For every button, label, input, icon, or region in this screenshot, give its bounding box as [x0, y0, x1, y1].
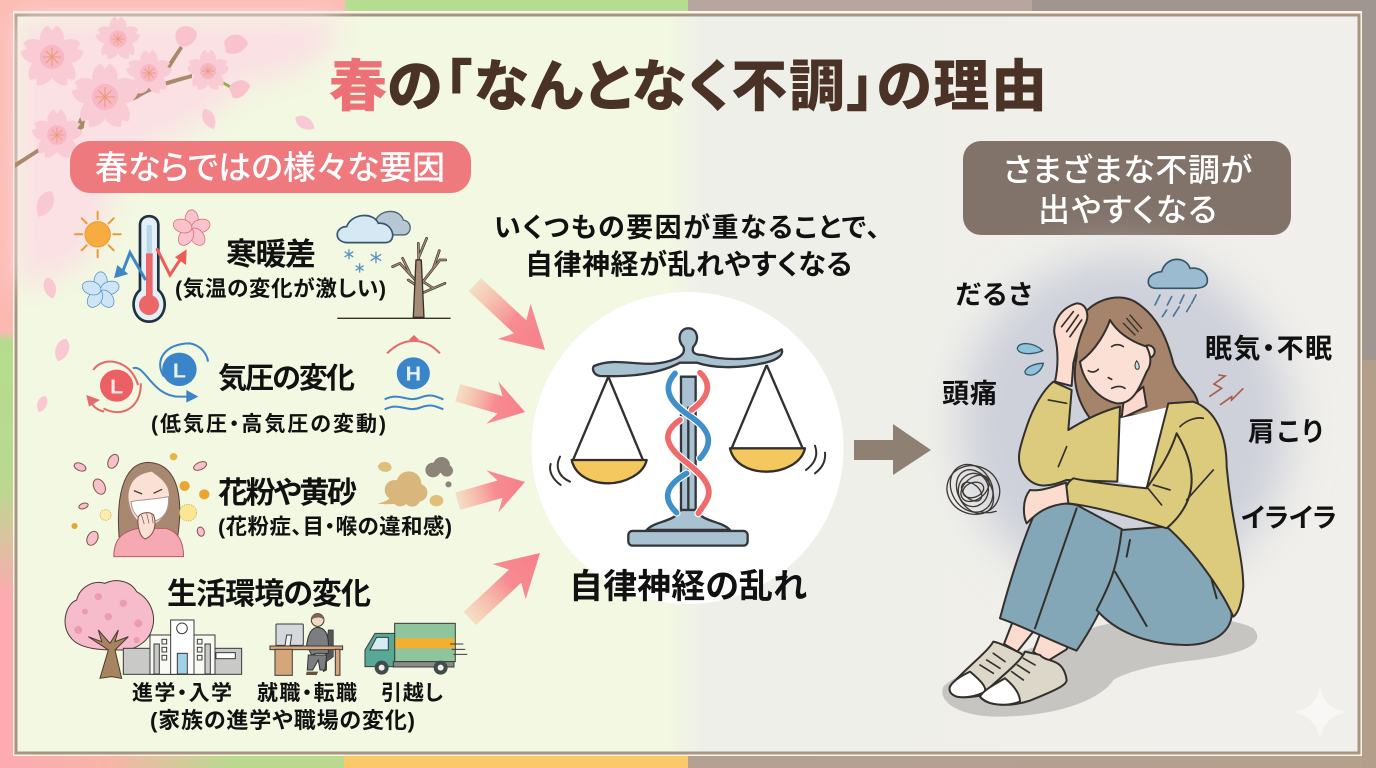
- factor: temperature difference: (気温の変化が激しい): [175, 276, 386, 301]
- icon: balance scale with helix: [550, 328, 825, 546]
- factor: lifestyle change: [65, 578, 467, 733]
- factor: temperature difference: 寒暖差: [226, 237, 316, 272]
- factor: pollen and dust: [71, 453, 453, 557]
- icon: cherry tree: [65, 581, 154, 678]
- factor: pressure change: (低気圧・高気圧の変動): [151, 413, 386, 436]
- icon: low pressure swirls: L: [110, 376, 123, 398]
- title: の「なんとなく不調」の理由: [387, 55, 1047, 118]
- arrow: pollen to balance: [452, 461, 531, 522]
- icon: high pressure: H: [406, 363, 421, 386]
- illustration: troubled woman: [940, 255, 1290, 717]
- sparkle: [1294, 686, 1346, 738]
- halo: [960, 255, 1290, 595]
- cherry blossom decoration: [15, 17, 336, 414]
- symptom labels: だるさ: [955, 280, 1032, 310]
- heading pill: symptoms: さまざまな不調が: [1003, 152, 1253, 188]
- figure: [950, 297, 1243, 705]
- symptom labels: 眠気・不眠: [1205, 334, 1332, 364]
- heading pill: factors: 春ならではの様々な要因: [95, 149, 445, 186]
- symptom labels: 肩こり: [1248, 417, 1323, 447]
- arrow: temperature to balance: [458, 267, 561, 368]
- factor: lifestyle change: 就職・転職: [257, 682, 357, 705]
- caption: overlapping factors: いくつもの要因が重なることで、: [494, 212, 880, 243]
- icon: thermometer and weather: [75, 210, 212, 322]
- icon: cloud, snow and bare tree: [337, 211, 451, 318]
- heading pill: symptoms: 出やすくなる: [1038, 192, 1217, 228]
- icon: low pressure swirls: L: [173, 360, 186, 382]
- arrow: to symptoms: [854, 424, 931, 475]
- factor: pressure change: 気圧の変化: [218, 362, 355, 395]
- icon: woman with mask and pollen: [71, 453, 209, 557]
- factor: lifestyle change: 引越し: [381, 682, 443, 705]
- heading pill: factors: [70, 141, 471, 193]
- factor: pollen and dust: 花粉や黄砂: [218, 477, 357, 510]
- icon: low pressure swirls: [86, 343, 208, 412]
- caption: overlapping factors: 自律神経が乱れやすくなる: [525, 248, 852, 280]
- factor: pollen and dust: (花粉症、目・喉の違和感): [218, 514, 452, 539]
- heading pill: symptoms: [963, 141, 1291, 235]
- caption: overlapping factors: [494, 212, 880, 280]
- title: 春: [329, 55, 387, 118]
- icon: desk worker: [270, 614, 343, 675]
- arrow: life change to balance: [453, 535, 556, 636]
- factor: lifestyle change: (家族の進学や職場の変化): [150, 708, 415, 733]
- factor: lifestyle change: 生活環境の変化: [167, 578, 371, 611]
- symptom labels: 頭痛: [942, 379, 997, 409]
- ground shadow: [942, 618, 1257, 717]
- factor: lifestyle change: 進学・入学: [132, 682, 232, 705]
- icon: high pressure: [385, 335, 443, 409]
- icon: moving truck: [365, 623, 467, 675]
- balance circle: [532, 292, 844, 606]
- decorations around figure: [940, 259, 1243, 522]
- factor: pressure change: [86, 335, 443, 436]
- symptom labels: イライラ: [1241, 503, 1337, 533]
- icon: dust clouds: [378, 457, 453, 507]
- icon: school: [123, 620, 242, 674]
- symptom labels: [942, 280, 1337, 533]
- balance circle: 自律神経の乱れ: [569, 568, 807, 606]
- factor: temperature difference: [75, 210, 451, 322]
- arrow: pressure to balance: [452, 372, 531, 433]
